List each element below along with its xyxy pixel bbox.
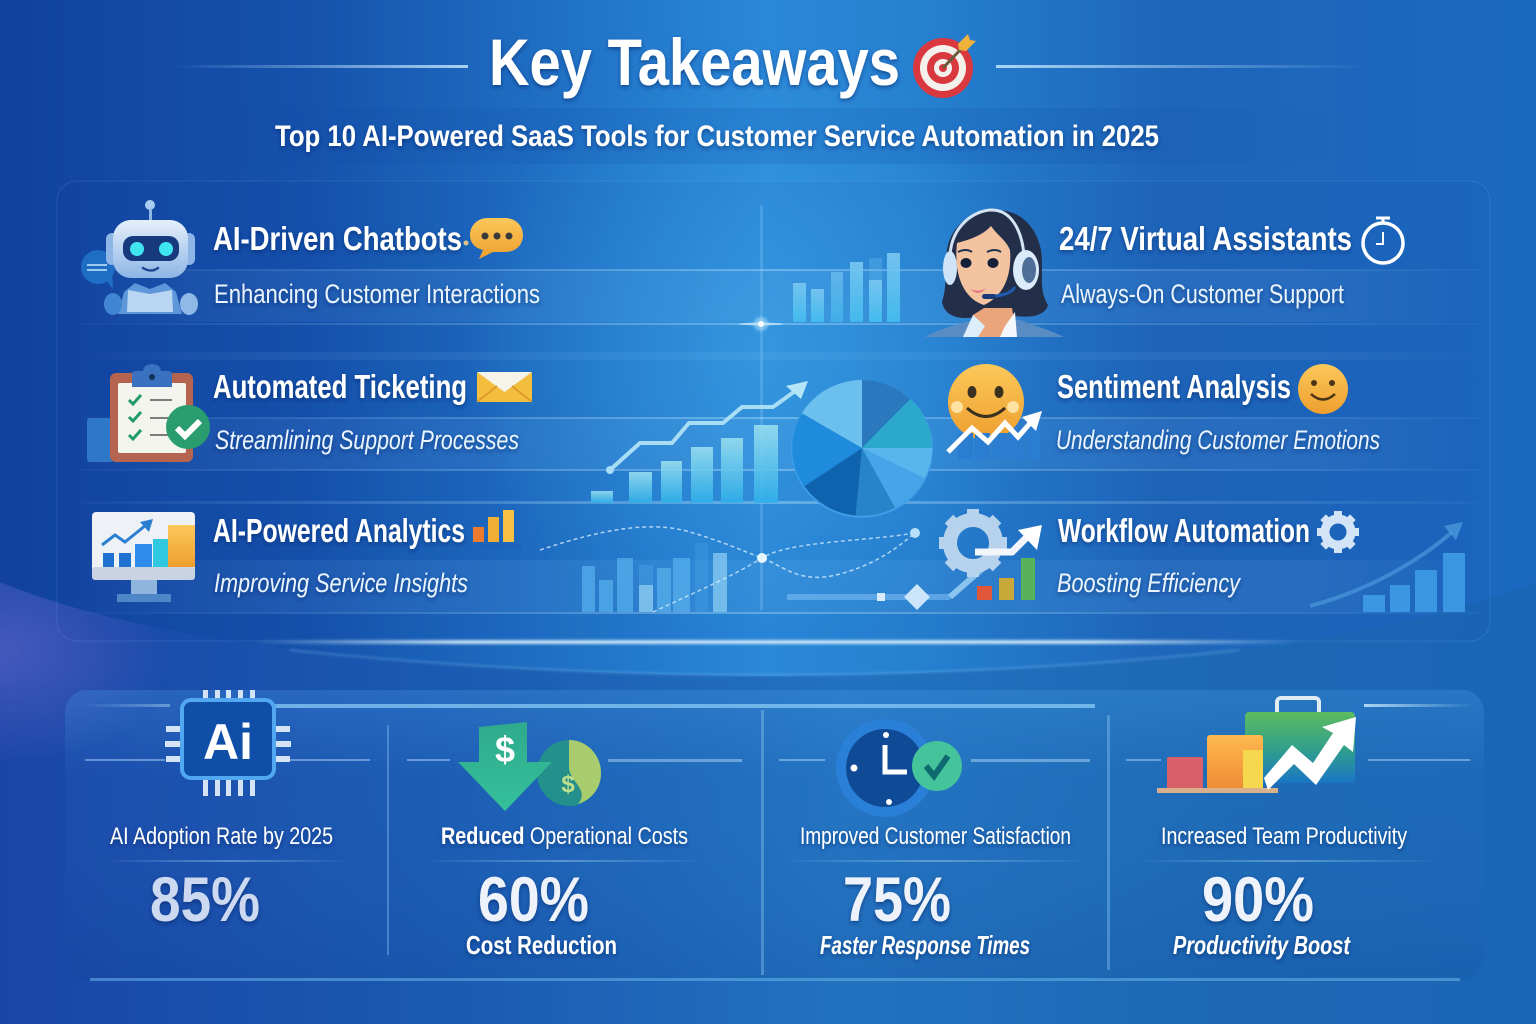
caption: Productivity Boost [1173,930,1351,960]
heading: AI-Driven Chatbots [213,220,462,257]
icon: gear, arrow and bars [787,509,1042,610]
value: 60% [478,865,589,935]
icon: AI chip: Ai [203,714,253,770]
metric: AI adoption [110,690,333,935]
chart: right corner bars [1310,522,1465,612]
panel: metrics [65,690,1484,981]
title block [170,25,1366,153]
icon: stopwatch [1363,218,1403,263]
icon: chat bubble [464,218,523,259]
label: Reduced Operational Costs [441,823,688,850]
item: Workflow Automation [787,509,1359,610]
metric: cost reduction [441,722,688,960]
caption: Cost Reduction [466,930,617,960]
icon: envelope [477,372,532,402]
icon: down arrow and coin: $ [495,729,515,770]
icon: small gear [1317,511,1359,553]
lower wave [0,582,1536,1024]
value: 90% [1202,865,1314,935]
subheading: Boosting Efficiency [1057,568,1241,598]
label: Improved Customer Satisfaction [800,823,1071,850]
item: Automated Ticketing [87,364,532,462]
subheading: Streamlining Support Processes [215,425,519,455]
icon: down arrow and coin [458,722,601,811]
icon: mini bars [467,510,521,548]
dashed network curves [540,527,920,612]
icon: briefcase and bars [1157,698,1356,793]
icon: robot [81,200,198,315]
label: AI Adoption Rate by 2025 [110,823,333,850]
icon: analytics monitor [92,512,195,602]
heading: Automated Ticketing [213,368,467,405]
icon: down arrow and coin: $ [561,771,575,798]
item: Sentiment Analysis [948,364,1380,459]
glint [739,317,783,331]
caption: Faster Response Times [820,930,1030,960]
chart: center top bars [793,253,900,322]
chart: growth bars and arrow [591,381,808,503]
chart: lower faded bars [582,543,727,612]
heading: Workflow Automation [1058,512,1310,549]
value: 75% [843,865,951,935]
heading: 24/7 Virtual Assistants [1059,220,1352,257]
subheading: Improving Service Insights [214,568,468,598]
icon: clipboard [87,364,210,462]
item: AI-Powered Analytics [92,510,521,602]
item: AI-Driven Chatbots [81,200,540,315]
subheading: Always-On Customer Support [1061,279,1344,309]
icon: small smiley [1298,364,1348,414]
subheading: Enhancing Customer Interactions [214,279,540,309]
subtitle: Top 10 AI-Powered SaaS Tools for Customer Service Automation in 2025 [275,120,1159,153]
panel: tools [57,181,1490,641]
icon: clock with check [841,724,962,812]
heading: AI-Powered Analytics [213,512,465,549]
item: 24/7 Virtual Assistants [925,210,1403,337]
heading: Sentiment Analysis [1057,368,1291,405]
title: Key Takeaways [489,25,900,99]
chart: pie [791,380,933,518]
icon: smiley with chart [948,364,1042,459]
icon: target with dart [913,34,976,98]
subheading: Understanding Customer Emotions [1056,425,1380,455]
icon: support agent [925,210,1064,337]
label: Increased Team Productivity [1161,823,1407,850]
metric: satisfaction [800,724,1071,960]
icon: AI chip [165,690,291,796]
value: 85% [150,865,260,935]
metric: productivity [1157,698,1407,960]
